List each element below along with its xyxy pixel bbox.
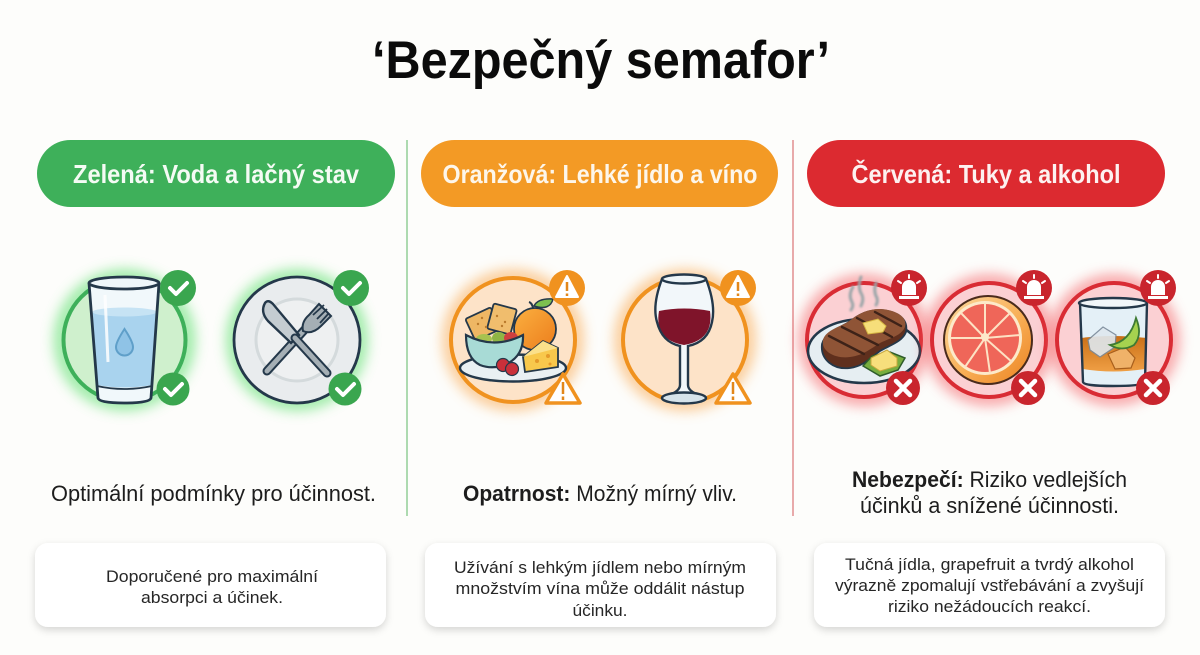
orange statement: Opatrnost: Možný mírný vliv.: [463, 481, 737, 506]
icon: alarm badge, grapefruit: [1016, 270, 1052, 306]
icon: warning triangle, snack: [546, 374, 580, 403]
icon: wine glass: [622, 274, 748, 404]
orange note card: účinku.: [572, 601, 628, 620]
orange note card: Užívání s lehkým jídlem nebo mírným: [454, 558, 746, 577]
icon: cross badge, grapefruit: [1011, 371, 1045, 405]
icon: whisky glass: [1056, 282, 1172, 398]
icon: warning triangle, wine: [716, 374, 750, 403]
red statement: [852, 467, 1127, 518]
green note card: absorpci a účinek.: [141, 588, 283, 607]
red heading pill: Červená: Tuky a alkohol: [852, 159, 1120, 189]
green note card: Doporučené pro maximální: [106, 567, 318, 586]
orange note card: [425, 543, 776, 627]
orange heading pill: [421, 140, 778, 207]
icon: cross badge, whisky: [1136, 371, 1170, 405]
green statement: Optimální podmínky pro účinnost.: [51, 481, 376, 506]
red statement: Nebezpečí: Riziko vedlejších: [852, 467, 1127, 492]
panel: red column: [806, 140, 1176, 627]
red statement: účinků a snížené účinnosti.: [860, 493, 1119, 518]
icon: check badge bottom, glass: [156, 372, 190, 406]
red note card: [814, 543, 1165, 627]
red note card: riziko nežádoucích reakcí.: [888, 597, 1091, 616]
green heading pill: Zelená: Voda a lačný stav: [73, 159, 359, 189]
red heading pill: [807, 140, 1165, 207]
green note card: [35, 543, 386, 627]
panel: green column: [35, 140, 395, 627]
orange heading pill: Oranžová: Lehké jídlo a víno: [442, 159, 758, 189]
icon: warning circle, snack: [549, 270, 585, 306]
red note card: Tučná jídla, grapefruit a tvrdý alkohol: [845, 555, 1134, 574]
icon: check badge top, glass: [160, 270, 196, 306]
icon: grapefruit: [931, 282, 1047, 398]
icon: steak on plate: [806, 277, 922, 398]
icon: warning circle, wine: [720, 270, 756, 306]
icon: cross badge, steak: [886, 371, 920, 405]
icon: alarm badge, steak: [891, 270, 927, 306]
panel: orange column: [421, 140, 778, 627]
title: ‘Bezpečný semafor’: [372, 31, 830, 90]
icon: check badge bottom, plate: [328, 372, 362, 406]
red note card: výrazně zpomalují vstřebávání a zvyšují: [835, 576, 1144, 595]
icon: alarm badge, whisky: [1140, 270, 1176, 306]
orange note card: množstvím vína může oddálit nástup: [456, 579, 744, 598]
icon: glass of water: [62, 277, 188, 403]
icon: check badge top, plate: [333, 270, 369, 306]
green heading pill: [37, 140, 395, 207]
icon: plate with cutlery: [234, 277, 360, 403]
icon: light snack plate: [450, 277, 576, 403]
